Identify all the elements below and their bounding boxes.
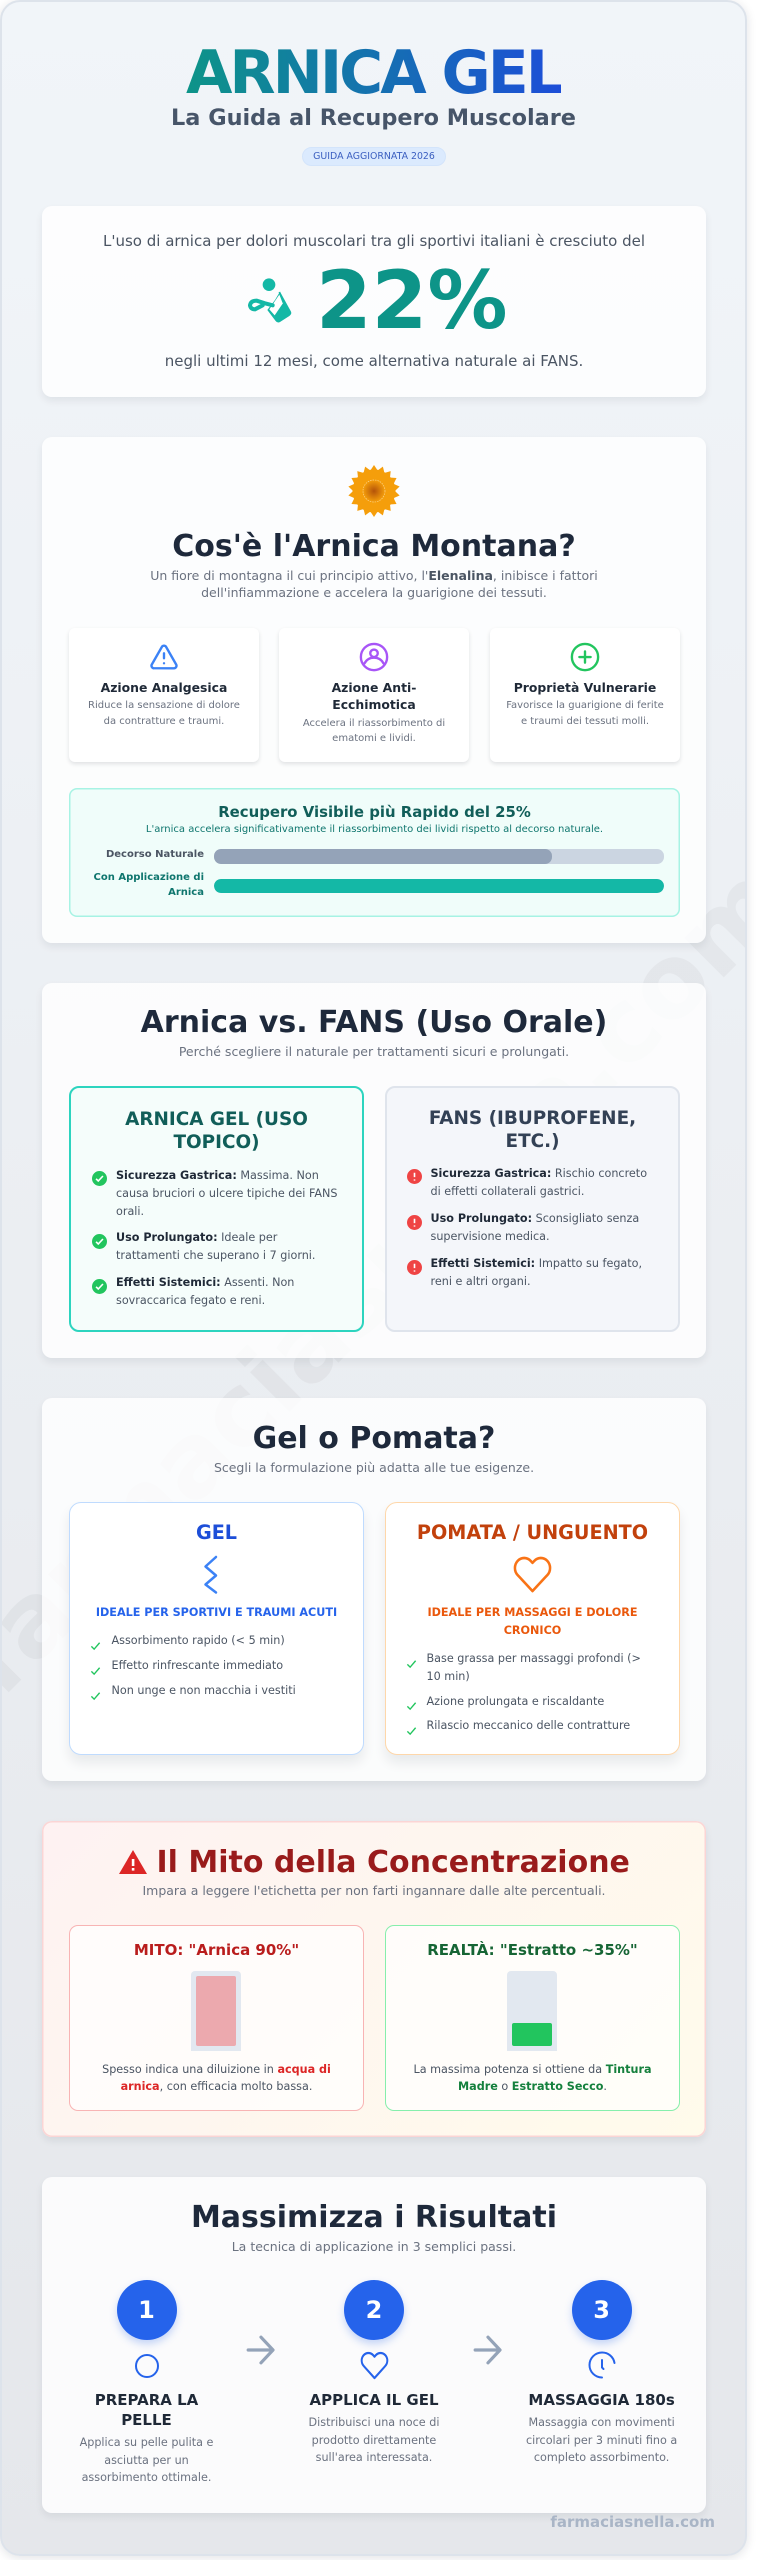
item: Non unge e non macchia i vestiti (112, 1684, 296, 1697)
gauge: 35% (507, 1970, 557, 2050)
number badge: 1 (138, 2296, 155, 2324)
card: mito (69, 1925, 364, 2111)
step title: PREPARA LA (95, 2391, 198, 2409)
label: con arnica: Con Applicazione di (94, 872, 204, 883)
step title: APPLICA IL GEL (309, 2391, 439, 2409)
text: statistic end: negli ultimi 12 mesi, come alternativa naturale ai FANS. (165, 352, 583, 370)
item: sicurezza gastrica: causa bruciori o ulcere tipiche dei FANS (116, 1187, 338, 1200)
card title: GEL (196, 1521, 237, 1544)
label: decorso naturale: Decorso Naturale (106, 849, 204, 860)
alert icon (407, 1215, 422, 1230)
big number 22%: 22% (316, 254, 507, 347)
item: sicurezza gastrica: Sicurezza Gastrica: Massima. Non (116, 1169, 319, 1182)
panel: arnica vs fans (42, 983, 706, 1358)
check mark (90, 1642, 100, 1650)
label: con arnica: Arnica (168, 887, 204, 898)
item: uso prolungato: Uso Prolungato: Sconsigliato senza (430, 1212, 639, 1225)
item: Assorbimento rapido (< 5 min) (112, 1634, 285, 1647)
card: proprietà vulnerarie (490, 628, 680, 762)
item: effetti sistemici (116, 1276, 294, 1307)
badge: guida aggiornata: GUIDA AGGIORNATA 2026 (313, 151, 435, 162)
card text: Spesso indica una diluizione in acqua di (102, 2062, 331, 2076)
card subtitle: CRONICO (504, 1624, 561, 1637)
card title: Azione Anti- (332, 680, 416, 695)
card: azione anti-ecchimotica (279, 628, 469, 762)
step text: completo assorbimento. (534, 2451, 669, 2464)
alert icon (407, 1169, 422, 1184)
panel: massimizza i risultati (42, 2177, 706, 2513)
card text: Favorisce la guarigione di ferite (506, 700, 664, 711)
heading: Il Mito della Concentrazione (156, 1845, 630, 1880)
bar: decorso naturale (214, 849, 664, 864)
card title: POMATA / UNGUENTO (417, 1521, 648, 1544)
card text: Accelera il riassorbimento di (303, 718, 445, 729)
column title: ETC.) (506, 1131, 560, 1152)
step text: Massaggia con movimenti (528, 2416, 675, 2429)
icon: warning (119, 1850, 147, 1874)
step text (62, 2434, 232, 2487)
card title: Proprietà Vulnerarie (514, 680, 656, 695)
card text (102, 2062, 331, 2093)
item: effetti sistemici: Effetti Sistemici: Impatto su fegato, (430, 1257, 642, 1270)
icon: heart (514, 1556, 552, 1592)
item: uso prolungato (430, 1212, 639, 1243)
heading: Gel o Pomata? (253, 1421, 495, 1456)
item: Effetto rinfrescante immediato (112, 1659, 283, 1672)
card text (386, 2060, 679, 2096)
subheading: Impara a leggere l'etichetta per non farti ingannare dalle alte percentuali. (142, 1883, 606, 1898)
step text: asciutta per un (104, 2454, 189, 2467)
check mark (406, 1702, 416, 1710)
step 1 (62, 2177, 232, 2513)
number badge (344, 2280, 404, 2340)
card text (303, 718, 445, 744)
card text (88, 700, 240, 727)
item: uso prolungato: trattamenti che superano i 7 giorni. (116, 1249, 315, 1262)
card text: Riduce la sensazione di dolore (88, 700, 240, 711)
icon: clock (587, 2350, 617, 2380)
item (426, 1652, 641, 1683)
card subtitle: IDEALE PER MASSAGGI E DOLORE (427, 1606, 638, 1619)
step text: assorbimento ottimale. (82, 2471, 211, 2484)
gauge: 90% (191, 1970, 241, 2050)
column title: FANS (IBUPROFENE, (429, 1108, 636, 1129)
card: realtà (385, 1925, 680, 2111)
step title: PELLE (121, 2411, 172, 2429)
list (406, 1652, 641, 1736)
badge: guida aggiornata (302, 147, 446, 166)
card title (332, 680, 416, 712)
chart subtitle: L'arnica accelera significativamente il riassorbimento dei lividi rispetto al decorso naturale. (146, 824, 603, 835)
card title: Azione Analgesica (101, 680, 227, 695)
card subtitle: IDEALE PER SPORTIVI E TRAUMI ACUTI (96, 1606, 337, 1619)
item: effetti sistemici: sovraccarica fegato e reni. (116, 1294, 265, 1307)
item: effetti sistemici: reni e altri organi. (430, 1275, 531, 1288)
number badge (572, 2280, 632, 2340)
chart title: Recupero Visibile più Rapido del 25% (218, 803, 531, 821)
arrow (471, 2334, 505, 2366)
step text (289, 2414, 459, 2467)
item: 10 min) (426, 1670, 470, 1683)
step text: Applica su pelle pulita e (80, 2436, 213, 2449)
column title (429, 1108, 636, 1152)
item: uso prolungato: supervisione medica. (430, 1230, 550, 1243)
card text: e traumi dei tessuti molli. (521, 716, 649, 727)
card text: La massima potenza si ottiene da Tintura (413, 2062, 652, 2076)
text: intro statistic: L'uso di arnica per dolori muscolari tra gli sportivi italiani è cresciuto del (103, 232, 645, 250)
step title: MASSAGGIA 180s (528, 2391, 675, 2409)
check icon (92, 1234, 107, 1249)
step text: prodotto direttamente (312, 2434, 436, 2447)
column title (125, 1109, 308, 1153)
item: sicurezza gastrica: di effetti collaterali gastrici. (430, 1185, 584, 1198)
icon: hand holding (248, 278, 292, 322)
item: Base grassa per massaggi profondi (> (426, 1652, 641, 1665)
check mark (90, 1667, 100, 1676)
icon: person in circle (360, 642, 388, 672)
step text: circolari per 3 minuti fino a (526, 2434, 677, 2447)
column title: TOPICO) (173, 1132, 260, 1153)
check mark (406, 1727, 416, 1736)
icon: plus in circle (570, 642, 600, 672)
text: description: Un fiore di montagna il cui principio attivo, l'Elenalina, inibisce i fattori (150, 568, 598, 582)
label: con arnica (94, 872, 204, 898)
icon: zigzag (204, 1556, 218, 1594)
card text: arnica, con efficacia molto bassa. (121, 2080, 312, 2093)
subheading: Perché scegliere il naturale per trattamenti sicuri e prolungati. (179, 1044, 569, 1059)
check icon (92, 1279, 107, 1294)
title: Arnica Gel: ARNICA GEL (186, 38, 561, 108)
item: effetti sistemici: Effetti Sistemici: Assenti. Non (116, 1276, 294, 1289)
card: pomata (385, 1502, 680, 1755)
item: effetti sistemici (430, 1257, 642, 1288)
icon: heart (361, 2353, 388, 2378)
bar: con arnica (214, 879, 664, 893)
panel: gel o pomata (42, 1398, 706, 1781)
card: gel (69, 1502, 364, 1755)
text: description (150, 568, 598, 600)
heading: Arnica vs. FANS (Uso Orale) (141, 1005, 607, 1040)
column title: ARNICA GEL (USO (125, 1109, 308, 1130)
footer brand: farmaciasnella.com (550, 2513, 715, 2531)
card title: Ecchimotica (332, 697, 416, 712)
number badge: 3 (593, 2296, 610, 2324)
card title: MITO: "Arnica 90%" (134, 1941, 299, 1959)
text: description: dell'infiammazione e accelera la guarigione dei tessuti. (201, 585, 547, 600)
icon: warning triangle (150, 644, 178, 670)
item: sicurezza gastrica: Sicurezza Gastrica: Rischio concreto (430, 1167, 647, 1180)
icon: arnica flower (348, 465, 400, 517)
step 3 (517, 2177, 687, 2513)
heading: Cos'è l'Arnica Montana? (172, 529, 576, 564)
item: uso prolungato (116, 1231, 315, 1262)
alert icon (407, 1260, 422, 1275)
check mark (90, 1692, 100, 1700)
column: fans (385, 1086, 680, 1332)
item: Azione prolungata e riscaldante (426, 1694, 604, 1708)
subheading: Scegli la formulazione più adatta alle tue esigenze. (214, 1460, 534, 1475)
panel: statistica 22% (42, 206, 706, 397)
item: sicurezza gastrica (430, 1167, 647, 1198)
subheading: La tecnica di applicazione in 3 semplici passi. (232, 2239, 516, 2254)
card text (506, 700, 664, 727)
list (90, 1634, 296, 1700)
item: sicurezza gastrica: orali. (116, 1205, 144, 1218)
card: azione analgesica (69, 628, 259, 762)
item: sicurezza gastrica (116, 1169, 338, 1218)
check icon (92, 1171, 107, 1186)
item: uso prolungato: Uso Prolungato: Ideale per (116, 1231, 277, 1244)
step title (62, 2390, 232, 2430)
card title: REALTÀ: "Estratto ~35%" (427, 1941, 638, 1959)
card text: da contratture e traumi. (104, 716, 224, 727)
card text: ematomi e lividi. (332, 733, 416, 744)
panel: cos'è l'arnica montana (42, 437, 706, 943)
step text: Distribuisci una noce di (309, 2416, 439, 2429)
card subtitle (427, 1606, 638, 1637)
step 2 (289, 2177, 459, 2513)
chart panel: recupero più rapido (69, 788, 680, 916)
panel: il mito della concentrazione (42, 1821, 706, 2137)
card text: Madre o Estratto Secco. (458, 2080, 607, 2093)
check mark (406, 1660, 416, 1668)
column: arnica gel (69, 1086, 364, 1332)
item: Rilascio meccanico delle contratture (426, 1719, 630, 1732)
number badge (116, 2280, 176, 2340)
heading: Massimizza i Risultati (191, 2200, 557, 2235)
icon: circle (132, 2351, 162, 2381)
step text (517, 2414, 687, 2467)
step text: sull'area interessata. (316, 2451, 432, 2464)
number badge: 2 (366, 2296, 382, 2324)
arrow (244, 2334, 278, 2366)
subtitle: La Guida al Recupero Muscolare (171, 105, 576, 131)
